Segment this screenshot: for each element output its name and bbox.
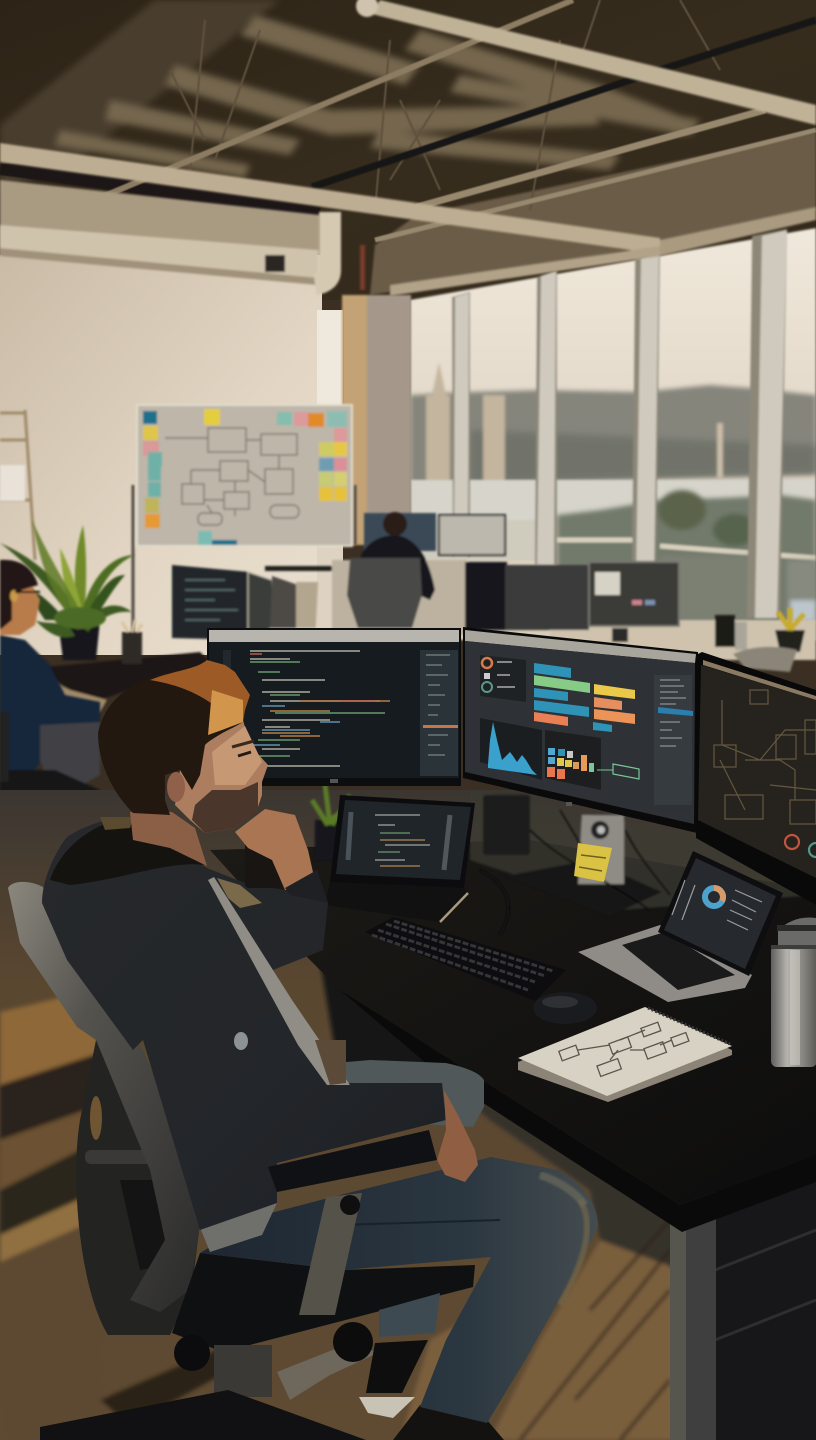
monitor: architecture diagram — [696, 652, 816, 905]
area chart — [488, 722, 537, 775]
man: hand on knee — [437, 1090, 478, 1182]
ceiling beams and ducts — [0, 0, 816, 296]
shelf ladder on wall — [0, 410, 35, 560]
man: jeans — [199, 1157, 598, 1423]
background office desks, monitors and colleague — [38, 512, 816, 712]
ceiling: exposed concrete with pipes — [0, 0, 816, 300]
keyboard — [365, 917, 566, 1001]
steel thermos — [771, 918, 816, 1067]
code lines — [250, 651, 390, 766]
desk items far right — [715, 615, 735, 647]
left monitors — [172, 565, 250, 640]
concrete pillar — [342, 295, 411, 545]
left desk — [38, 652, 210, 700]
far monitors — [364, 513, 436, 551]
windows with bay view — [410, 228, 816, 640]
far office chair — [347, 558, 422, 628]
laptop with code — [325, 795, 475, 922]
monitor: code editor — [207, 628, 461, 786]
computer mouse — [533, 992, 597, 1024]
man: hoodie — [42, 817, 446, 1230]
man: head and hand at chin — [98, 660, 328, 903]
chair seat and base — [40, 1253, 475, 1440]
man: chair armrest — [268, 1130, 437, 1315]
foreground trees, houses and balcony — [557, 495, 816, 640]
floor with sun stripes and shadows — [0, 790, 816, 1440]
small desk plant — [312, 785, 350, 860]
center stand and pot items — [470, 790, 816, 935]
desk surface, leg and drawer cabinet — [210, 840, 816, 1440]
wall with window strip — [0, 180, 343, 655]
office chair back — [8, 882, 200, 1335]
colleague at far desk — [361, 535, 435, 600]
distant hills — [410, 385, 816, 485]
potted plant — [0, 520, 135, 660]
skyline towers — [426, 362, 723, 483]
sticky note on stand — [574, 843, 612, 882]
monitor: dashboard with charts and colored blocks — [463, 627, 698, 833]
colleague on the left — [0, 560, 100, 860]
laptop with dashboard — [578, 851, 783, 1002]
PC tower — [465, 562, 507, 630]
man: far leg and shoes — [335, 1060, 504, 1440]
whiteboard with diagram and sticky notes — [133, 405, 355, 650]
spiral notebook with sketched diagram — [518, 1007, 732, 1102]
